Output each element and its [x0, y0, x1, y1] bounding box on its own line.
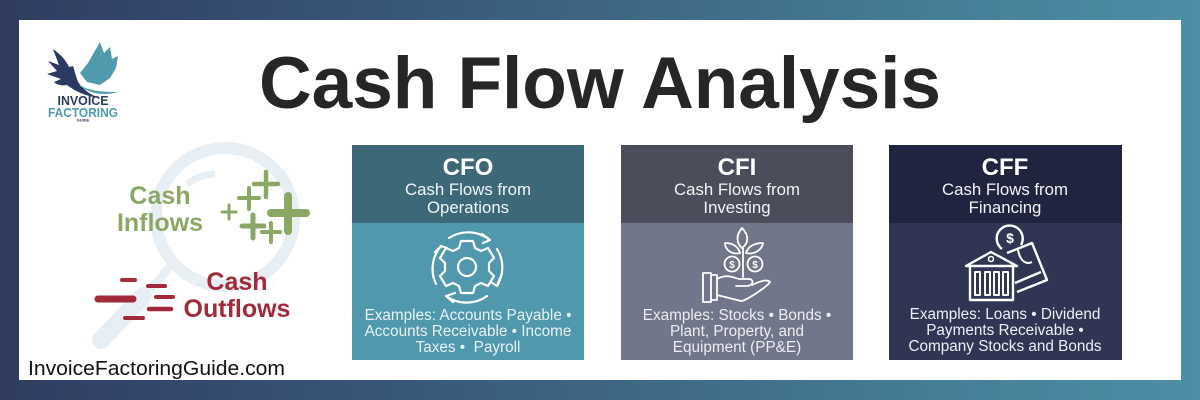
CFF examples: Examples: Loans • Dividend	[910, 306, 1100, 323]
CFF examples: Company Stocks and Bonds	[908, 338, 1102, 355]
CFI examples: Examples: Stocks • Bonds •	[643, 307, 831, 324]
panel: CFO	[352, 145, 584, 360]
cash inflows label: Cash	[129, 182, 191, 210]
logo: GUIDE	[77, 118, 90, 122]
icon: hand with plant	[703, 228, 770, 302]
icon: dollar signs	[729, 260, 758, 271]
CFI examples: Equipment (PP&E)	[673, 339, 801, 356]
icon: dollar signs: $	[752, 260, 758, 271]
panel: CFF	[889, 145, 1122, 360]
CFF heading: CFF	[982, 154, 1028, 181]
CFO examples: Taxes • Payroll	[416, 339, 520, 356]
title: Cash Flow Analysis	[259, 43, 941, 124]
CFO examples: Accounts Receivable • Income	[365, 323, 571, 340]
cash outflows label line 2: Outflows	[184, 295, 290, 323]
icon: minus signs	[98, 280, 173, 318]
logo	[47, 42, 118, 122]
icon: eagle wings	[47, 42, 118, 98]
logo wordmark: INVOICE	[58, 93, 109, 108]
CFO heading: CFO	[443, 154, 493, 181]
CFI subtitle: Investing	[703, 198, 771, 217]
icon: gear with arrows	[433, 232, 502, 303]
CFF subtitle: Cash Flows from	[942, 180, 1068, 199]
CFI examples: Plant, Property, and	[670, 323, 804, 340]
CFO examples: Examples: Accounts Payable •	[365, 307, 571, 324]
icon: bank with money	[966, 226, 1047, 300]
cash inflows label line 2: Inflows	[117, 209, 203, 237]
CFF examples: Payments Receivable •	[926, 322, 1084, 339]
CFO subtitle: Operations	[427, 198, 509, 217]
icon: dollar signs: $	[729, 260, 735, 271]
CFI subtitle: Cash Flows from	[674, 180, 800, 199]
cash outflows label: Cash	[206, 268, 268, 296]
CFO subtitle: Cash Flows from	[405, 180, 531, 199]
website footer: InvoiceFactoringGuide.com	[28, 358, 285, 380]
CFF subtitle: Financing	[969, 198, 1041, 217]
CFI heading: CFI	[718, 154, 756, 181]
panel: CFI	[621, 145, 853, 360]
icon: bank with money: $	[1006, 230, 1014, 246]
icon: magnifying glass	[101, 148, 294, 340]
logo: FACTORING	[48, 105, 118, 120]
icon: plus signs	[222, 172, 306, 242]
